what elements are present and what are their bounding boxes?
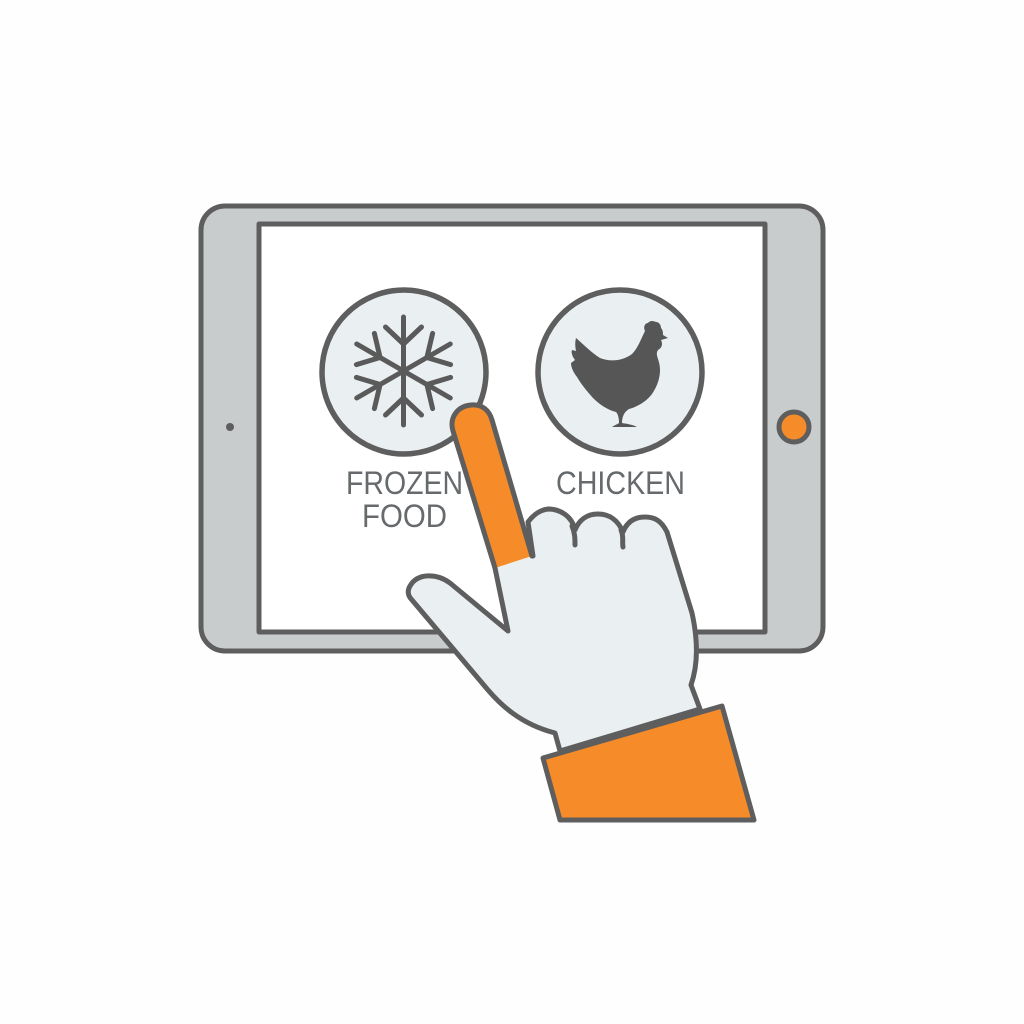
tablet body <box>201 206 823 651</box>
option: chicken <box>538 290 702 501</box>
label: chicken: CHICKEN <box>556 465 685 501</box>
sleeve cuff <box>543 706 754 820</box>
home button <box>779 412 809 442</box>
icon: chicken circle <box>538 290 702 454</box>
tablet <box>201 206 823 651</box>
icon: snowflake circle <box>322 290 486 454</box>
label: frozen food: FROZEN <box>346 465 463 501</box>
tablet screen <box>259 224 765 632</box>
label: frozen food: FOOD <box>362 498 447 534</box>
index finger outline <box>452 405 532 568</box>
hand pointing <box>408 405 754 820</box>
hand <box>408 509 700 751</box>
orange index finger fill <box>452 405 532 568</box>
finger creases <box>572 526 623 547</box>
option: frozen food <box>322 290 486 534</box>
camera dot <box>226 423 234 431</box>
